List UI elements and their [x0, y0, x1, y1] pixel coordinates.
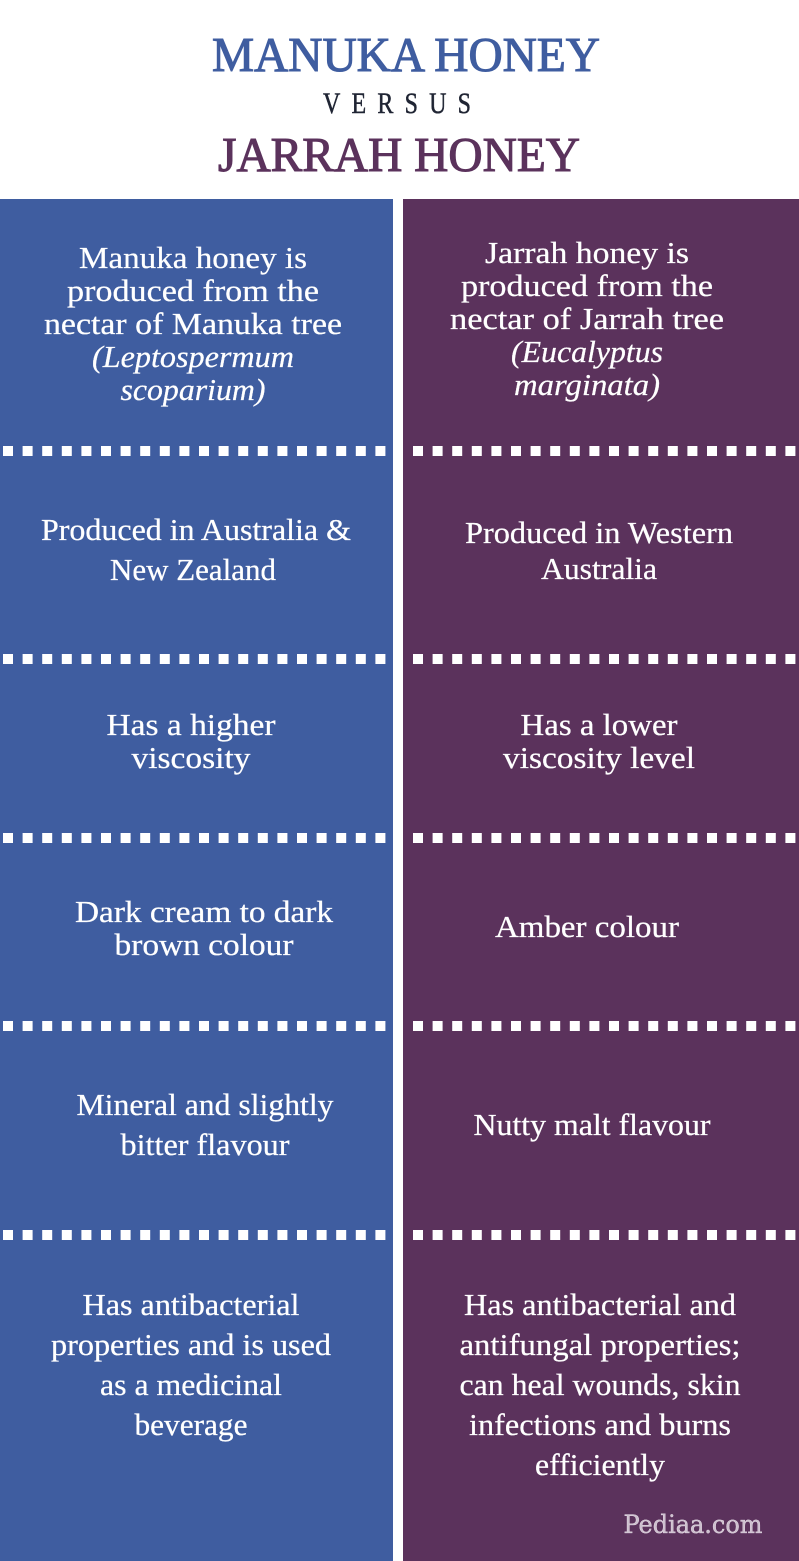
Jarrah text: source: [450, 235, 724, 402]
Jarrah text: source: marginata): [514, 367, 660, 402]
Manuka text: uses: [51, 1287, 332, 1442]
Manuka text: uses: Has antibacterial: [82, 1287, 300, 1322]
Jarrah text: uses: antifungal properties;: [460, 1327, 740, 1362]
Jarrah text: colour: Amber colour: [495, 909, 680, 944]
Jarrah text: region: [465, 515, 734, 586]
Manuka text: viscosity: Has a higher: [106, 707, 276, 742]
Manuka text: source: (Leptospermum: [92, 339, 294, 374]
Jarrah text: source: produced from the: [461, 268, 713, 303]
Manuka text: source: nectar of Manuka tree: [44, 306, 342, 341]
Manuka text: source: Manuka honey is: [79, 240, 307, 275]
Jarrah text: uses: Has antibacterial and: [464, 1287, 737, 1322]
Jarrah text: region: Produced in Western: [465, 515, 734, 550]
Manuka text: uses: beverage: [134, 1407, 248, 1442]
title: versus: VERSUS: [323, 86, 471, 120]
Manuka text: source: produced from the: [67, 273, 319, 308]
Jarrah text: source: nectar of Jarrah tree: [450, 301, 724, 336]
Jarrah text: source: (Eucalyptus: [511, 334, 663, 369]
Jarrah text: region: Australia: [541, 551, 657, 586]
panel: Manuka column background: [0, 199, 393, 1561]
panel: Jarrah column background: [403, 199, 799, 1561]
Manuka text: viscosity: viscosity: [132, 740, 251, 775]
Manuka text: colour: Dark cream to dark: [75, 894, 334, 929]
Manuka text: source: scoparium): [120, 372, 266, 407]
Manuka text: viscosity: [106, 707, 276, 775]
Jarrah text: viscosity: viscosity level: [503, 740, 695, 775]
Manuka text: region: New Zealand: [110, 552, 276, 587]
Jarrah text: uses: can heal wounds, skin: [460, 1367, 741, 1402]
Manuka text: flavour: bitter flavour: [120, 1127, 290, 1162]
Jarrah text: uses: infections and burns: [469, 1407, 731, 1442]
Manuka text: colour: [75, 894, 334, 962]
logo: Pediaa.com: Pediaa.com: [624, 1510, 763, 1539]
title: Jarrah Honey: JARRAH HONEY: [218, 127, 580, 182]
Manuka text: flavour: Mineral and slightly: [76, 1087, 334, 1122]
Manuka text: uses: properties and is used: [51, 1327, 332, 1362]
Jarrah text: uses: efficiently: [535, 1447, 665, 1482]
Manuka text: colour: brown colour: [114, 927, 294, 962]
Manuka text: uses: as a medicinal: [100, 1367, 282, 1402]
Manuka text: region: Produced in Australia &: [41, 512, 351, 547]
Jarrah text: viscosity: [503, 707, 695, 775]
Jarrah text: uses: [460, 1287, 741, 1482]
Jarrah text: flavour: Nutty malt flavour: [474, 1107, 711, 1142]
Manuka text: source: [44, 240, 342, 407]
Manuka text: region: [41, 512, 351, 587]
Manuka text: flavour: [76, 1087, 334, 1162]
Jarrah text: viscosity: Has a lower: [520, 707, 678, 742]
Jarrah text: source: Jarrah honey is: [485, 235, 689, 270]
title: Manuka Honey: MANUKA HONEY: [212, 27, 600, 82]
